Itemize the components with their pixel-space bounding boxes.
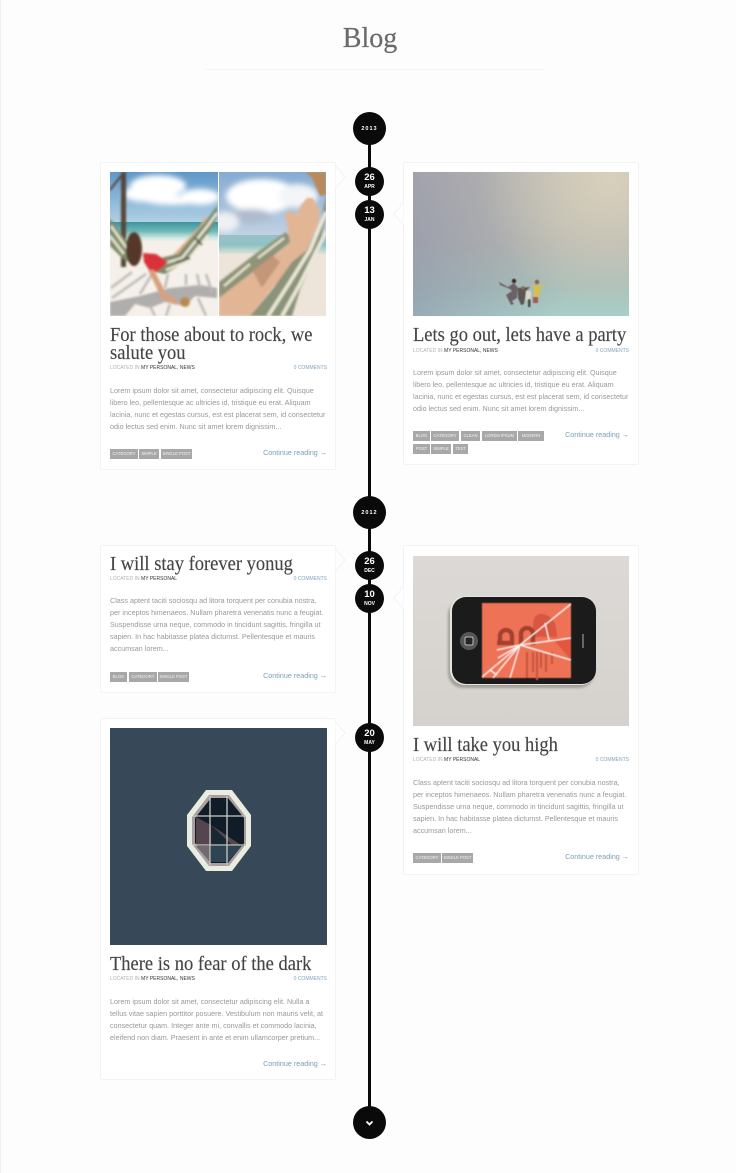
post 2 tags: BLOG: [416, 433, 427, 438]
post 2 tags: [413, 431, 544, 454]
heading: post 5: There is no fear of the dark: [110, 953, 311, 975]
date text 26: 26: [364, 556, 375, 567]
year marker 2013: 2013: [361, 126, 378, 132]
post 2 tags: CATEGORY: [433, 433, 457, 438]
arrow card 5: [336, 722, 345, 744]
post 3 body: [110, 596, 323, 653]
post 2 tags: TEXT: [455, 446, 466, 451]
post 4 tags: [413, 853, 473, 863]
card 2 background: [403, 162, 639, 465]
date marker 26 Dec: [355, 551, 384, 580]
post 4 comments: 0 COMMENTS: [596, 757, 629, 763]
panel: post 5: [100, 718, 345, 1080]
post 2 body: libero leo, pellentesque ac ultricies id, tristique eu erat. Aliquam: [413, 380, 614, 389]
post 3 tags: CATEGORY: [131, 674, 155, 679]
post 1 tags: SINGLE POST: [163, 451, 190, 456]
post 5 body: tellus vitae sapien porttitor posuere. Vestibulum non mauris velit, at: [110, 1009, 323, 1018]
card 5 background: [100, 718, 336, 1080]
post 2 continue reading: Continue reading →: [565, 430, 629, 439]
month text Jan: JAN: [364, 217, 374, 223]
post 4 body: Class aptent taciti sociosqu ad litora torquent per conubia nostra,: [413, 778, 620, 787]
post 2 comments: 0 COMMENTS: [596, 348, 629, 354]
year marker 2012: [353, 496, 386, 529]
card 3 background: [100, 545, 336, 693]
post 1 meta: LOCATED IN MY PERSONAL, NEWS: [110, 365, 195, 371]
post 4 continue reading: Continue reading →: [565, 852, 629, 861]
arrow card 3: [336, 550, 345, 570]
post 3 body: per inceptos himenaeos. Nullam pharetra venenatis nunc a feugiat.: [110, 608, 323, 617]
post 1 body: lacinia, nunc et egestas cursus, est est placerat sem, id consectetur: [110, 410, 325, 419]
post 1 continue reading: Continue reading →: [263, 448, 327, 457]
card 4 background: [403, 545, 639, 875]
post 1 body: [110, 386, 326, 431]
post 2 tags: SIMPLE: [433, 446, 449, 451]
post 5 meta: LOCATED IN MY PERSONAL, NEWS: [110, 976, 195, 982]
post 1 tags: CATEGORY: [112, 451, 136, 456]
panel: post 4: [394, 545, 639, 875]
post 3 body: Class aptent taciti sociosqu ad litora torquent per conubia nostra,: [110, 596, 317, 605]
date marker 26 Apr: [355, 167, 384, 196]
post 5 body: eleifend non diam. Praesent in ante et enim ullamcorper pretium...: [110, 1033, 320, 1042]
heading: post 1: salute you: [110, 342, 186, 364]
post 2 body: [413, 368, 628, 413]
image: cracked phone: [413, 556, 629, 726]
post 3 tags: BLOG: [113, 674, 124, 679]
post 1 body: libero leo, pellentesque ac ultricies id, tristique eu erat. Aliquam: [110, 398, 311, 407]
heading: post 1: [110, 324, 312, 364]
year marker 2013: [353, 112, 386, 145]
post 5 body: consectetur quam. Integer ante mi, convallis et commodo lacinia,: [110, 1021, 317, 1030]
post 5 comments: 0 COMMENTS: [294, 976, 327, 982]
panel: post 3: [100, 545, 345, 693]
post 3 continue reading: Continue reading →: [263, 671, 327, 680]
post 2 tags: LOREM IPSUM: [485, 433, 514, 438]
post 2 body: odio lectus sed enim. Nunc sit amet lorem dignissim...: [413, 404, 584, 413]
date text 10: 10: [364, 589, 375, 600]
post 1 tags: SIMPLE: [141, 451, 157, 456]
post 3 comments: 0 COMMENTS: [294, 576, 327, 582]
month text Dec: DEC: [364, 568, 375, 574]
post 2 meta: LOCATED IN MY PERSONAL, NEWS: [413, 348, 498, 354]
date marker 10 Nov: [355, 584, 384, 613]
month text May: MAY: [364, 740, 375, 746]
card 1 background: [100, 162, 336, 470]
post 1 body: Lorem ipsum dolor sit amet, consectetur adipiscing elit. Quisque: [110, 386, 314, 395]
post 1 tags: [110, 449, 192, 459]
arrow card 4: [394, 588, 404, 608]
post 4 body: per inceptos himenaeos. Nullam pharetra venenatis nunc a feugiat.: [413, 790, 626, 799]
post 2 tags: POST: [416, 446, 427, 451]
image: octagonal window: [110, 728, 327, 945]
post 1 body: odio lectus sed enim. Nunc sit amet lorem dignissim...: [110, 422, 281, 431]
arrow card 1: [336, 166, 345, 188]
post 3 tags: SINGLE POST: [160, 674, 187, 679]
post 2 tags: CLEAN: [464, 433, 477, 438]
date marker 20 May: [355, 723, 384, 752]
date text 26: 26: [364, 172, 375, 183]
post 1 comments: 0 COMMENTS: [294, 365, 327, 371]
post 2 body: Lorem ipsum dolor sit amet, consectetur adipiscing elit. Quisque: [413, 368, 617, 377]
post 3 body: sapien. In hac habitasse platea dictumst. Pellentesque et mauris: [110, 632, 315, 641]
end marker with chevron: [353, 1106, 386, 1139]
heading: post 3: I will stay forever yonug: [110, 553, 293, 575]
post 3 body: Suspendisse urna neque, commodo in tincidunt sagittis, fringilla ut: [110, 620, 321, 629]
panel: post 1: [100, 162, 345, 470]
post 3 meta: LOCATED IN MY PERSONAL: [110, 576, 177, 582]
image: jumping people in sky: [413, 172, 629, 316]
year marker 2012: 2012: [361, 510, 378, 516]
post 5 body: [110, 997, 323, 1042]
image: hammock photo: [110, 172, 326, 316]
post 4 tags: SINGLE POST: [444, 855, 471, 860]
post 5 body: Lorem ipsum dolor sit amet, consectetur adipiscing elit. Nulla a: [110, 997, 309, 1006]
timeline line: [368, 129, 371, 1122]
date text 20: 20: [364, 728, 375, 739]
post 4 meta: LOCATED IN MY PERSONAL: [413, 757, 480, 763]
post 2 body: lacinia, nunc et egestas cursus, est est placerat sem, id consectetur: [413, 392, 628, 401]
month text Nov: NOV: [364, 601, 375, 607]
date marker 13 Jan: [355, 200, 384, 229]
post 4 tags: CATEGORY: [415, 855, 439, 860]
month text Apr: APR: [364, 184, 375, 190]
panel: post 2: [394, 162, 639, 465]
post 4 body: Suspendisse urna neque, commodo in tincidunt sagittis, fringilla ut: [413, 802, 624, 811]
post 3 tags: [110, 672, 189, 682]
post 4 body: sapien. In hac habitasse platea dictumst. Pellentesque et mauris: [413, 814, 618, 823]
heading: post 1: For those about to rock, we: [110, 324, 312, 346]
heading: post 4: I will take you high: [413, 734, 558, 756]
post 5 continue reading: Continue reading →: [263, 1059, 327, 1068]
post 4 body: accumsan lorem...: [413, 826, 472, 835]
date text 13: 13: [364, 205, 375, 216]
post 4 body: [413, 778, 626, 835]
icon: chevron down: [366, 1120, 374, 1126]
post 2 tags: MODERN: [522, 433, 540, 438]
post 3 body: accumsan lorem...: [110, 644, 169, 653]
heading: post 2: Lets go out, lets have a party: [413, 324, 626, 346]
arrow card 2: [394, 204, 404, 224]
title: Blog: [343, 23, 397, 54]
